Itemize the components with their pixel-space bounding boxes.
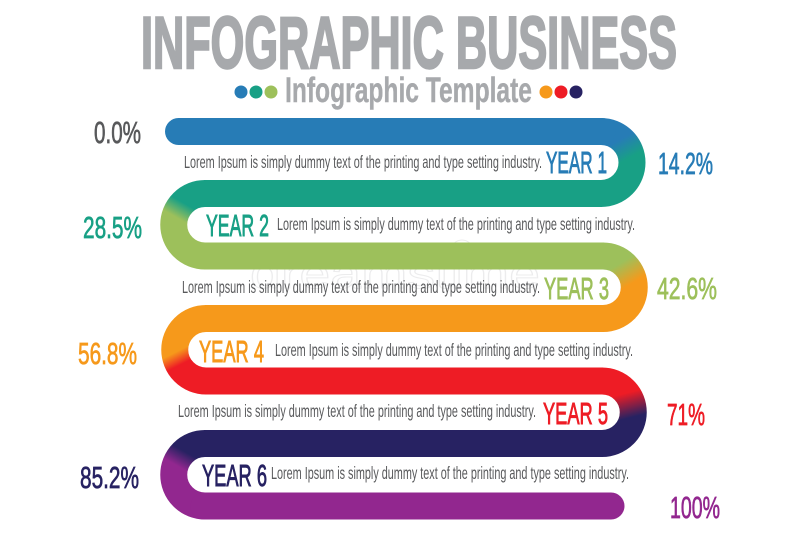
percent: 42.6%: 42.6%	[657, 271, 717, 306]
label: year 5: YEAR 5	[543, 396, 608, 431]
ribbon bar: purple	[204, 492, 611, 520]
serpentine timeline ribbon	[174, 132, 634, 506]
percent: 100%: 100%	[670, 490, 720, 525]
icon: right dots	[540, 86, 582, 98]
label: year 2: YEAR 2	[206, 208, 269, 243]
ribbon bar: blue	[178, 118, 602, 145]
row: year 6	[80, 458, 629, 495]
ribbon turn: teal to green	[174, 194, 205, 256]
row: year 5	[178, 396, 705, 432]
percent: 71%: 71%	[667, 397, 705, 432]
row: year 1	[184, 145, 713, 181]
percent: 28.5%: 28.5%	[83, 210, 142, 245]
label: year 1: YEAR 1	[546, 145, 607, 180]
percent: 56.8%: 56.8%	[78, 336, 137, 371]
ribbon bar: red	[205, 368, 603, 394]
ribbon bar: navy	[204, 430, 603, 457]
description 1: Lorem Ipsum is simply dummy text of the printing and type setting industry.	[184, 152, 542, 172]
row: year 4	[78, 334, 633, 371]
description 5: Lorem Ipsum is simply dummy text of the printing and type setting industry.	[178, 401, 536, 421]
watermark	[250, 240, 540, 297]
description 3: Lorem Ipsum is simply dummy text of the printing and type setting industry.	[182, 277, 540, 297]
ribbon turn: navy to purple	[174, 444, 205, 506]
percent: 85.2%: 85.2%	[80, 460, 139, 495]
percent: 14.2%: 14.2%	[658, 146, 713, 181]
ribbon turn: orange to red	[175, 318, 206, 381]
ribbon turn: blue to teal	[601, 132, 632, 194]
ribbon turn: red to navy	[602, 381, 633, 444]
subtitle row with dots	[234, 71, 582, 110]
row: year 3	[182, 271, 717, 306]
row: year 2	[83, 208, 635, 245]
label: year 3: YEAR 3	[544, 271, 609, 306]
ribbon bar: orange	[205, 305, 604, 332]
subtitle: Infographic Template	[285, 71, 532, 110]
ribbon bar: teal	[204, 180, 602, 207]
icon: left dots	[234, 86, 278, 98]
ribbon bar: green	[204, 242, 604, 270]
watermark: dreamstime	[250, 250, 540, 297]
label: year 6: YEAR 6	[202, 458, 267, 493]
percent: 0.0%: 0.0%	[94, 115, 141, 150]
label: year 4: YEAR 4	[199, 334, 264, 369]
ribbon turn: green to orange	[603, 256, 634, 318]
